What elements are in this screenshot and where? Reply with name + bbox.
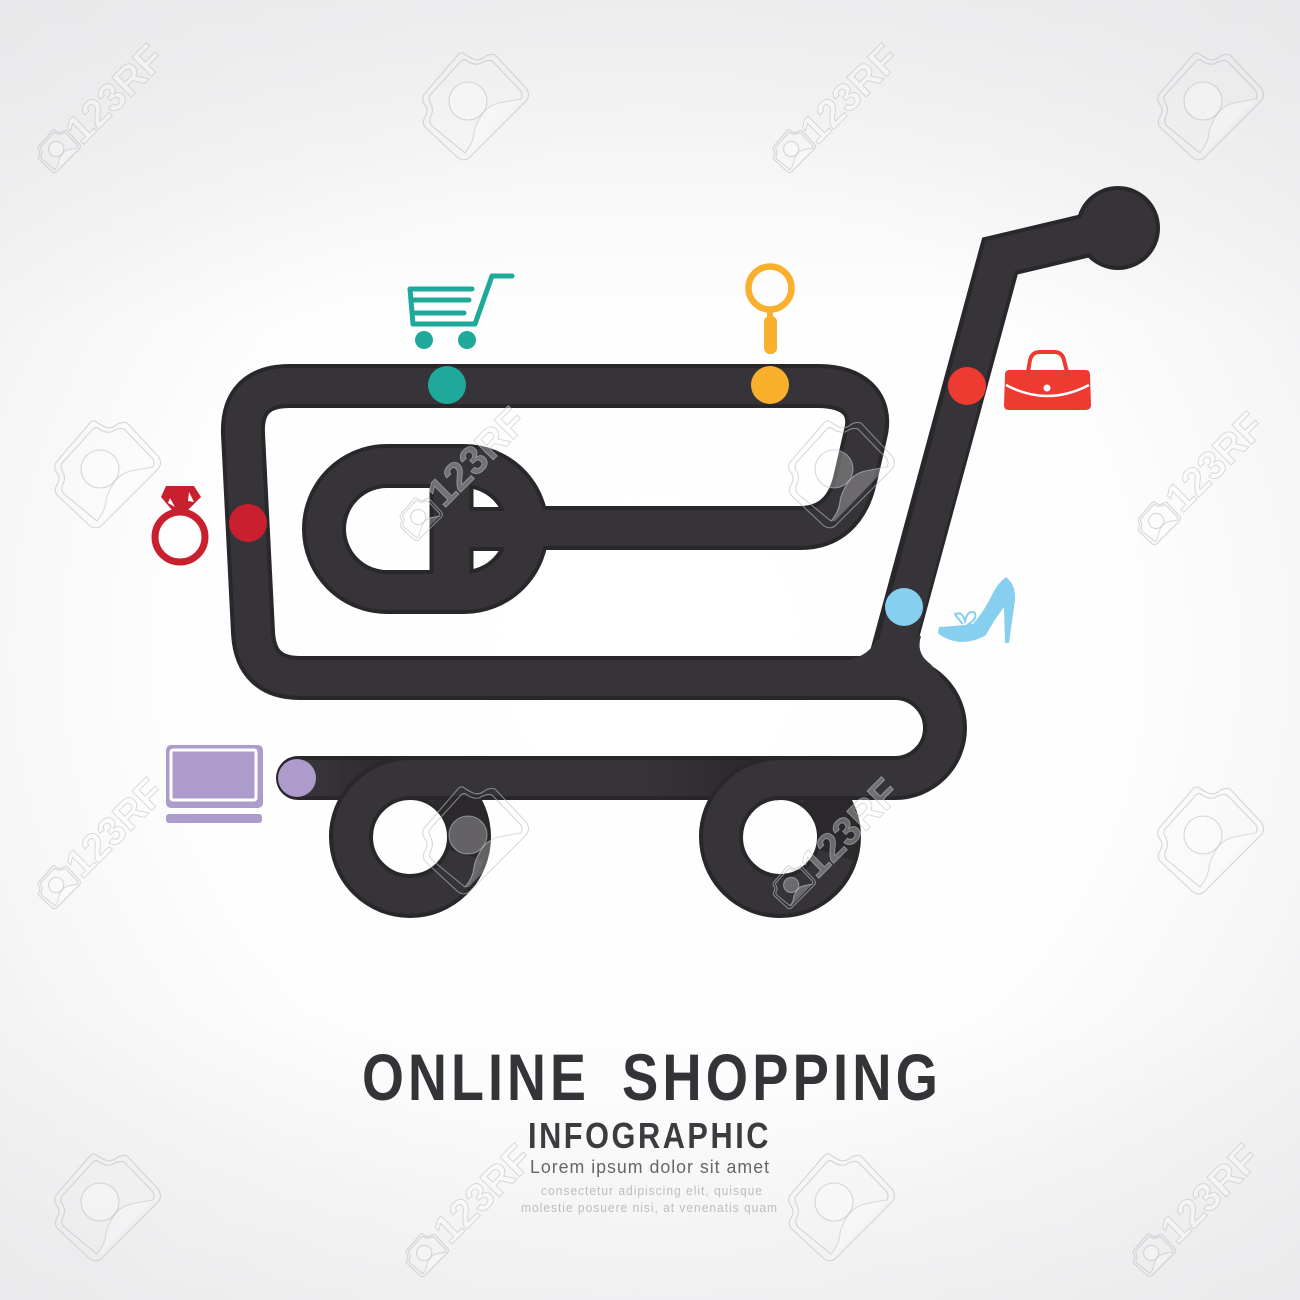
watermarks: 123RF xyxy=(1157,404,1273,520)
body text: consectetur adipiscing elit, quisque xyxy=(541,1184,763,1198)
subtitle: INFOGRAPHIC xyxy=(528,1115,771,1156)
watermarks: 123RF xyxy=(425,1136,541,1252)
icon: high heel shoe xyxy=(938,577,1015,643)
watermarks: 123RF xyxy=(419,399,535,515)
cart body dark outline layer xyxy=(243,186,1160,896)
cart body inner layer xyxy=(243,386,945,896)
title: SHOPPING xyxy=(622,1040,942,1114)
route dot: yellow xyxy=(751,366,789,404)
icon: handbag xyxy=(1004,352,1091,410)
body text: molestie posuere nisi, at venenatis quam xyxy=(521,1201,778,1215)
icon: laptop xyxy=(166,745,263,823)
watermarks: 123RF xyxy=(57,36,173,152)
cart pole and handle xyxy=(852,190,1156,685)
icon: shopping cart xyxy=(410,276,512,349)
body text xyxy=(521,1184,778,1215)
watermarks: 123RF xyxy=(792,36,908,152)
watermarks: 123RF xyxy=(1152,1136,1268,1252)
route dot: lilac xyxy=(278,759,316,797)
route dot: light blue xyxy=(885,588,923,626)
icon: magnifying glass xyxy=(748,266,792,354)
icon: diamond ring xyxy=(155,486,205,562)
route dot: teal xyxy=(428,366,466,404)
front wheel arcs xyxy=(351,778,892,838)
title xyxy=(362,1040,942,1114)
shopping cart route diagram xyxy=(243,186,1160,896)
tagline: Lorem ipsum dolor sit amet xyxy=(530,1157,770,1177)
watermarks: 123RF xyxy=(792,770,908,886)
watermarks: 123RF xyxy=(57,770,173,886)
route dot: crimson ring xyxy=(229,504,267,542)
route dot: red bag xyxy=(948,367,986,405)
title: ONLINE xyxy=(362,1040,590,1114)
